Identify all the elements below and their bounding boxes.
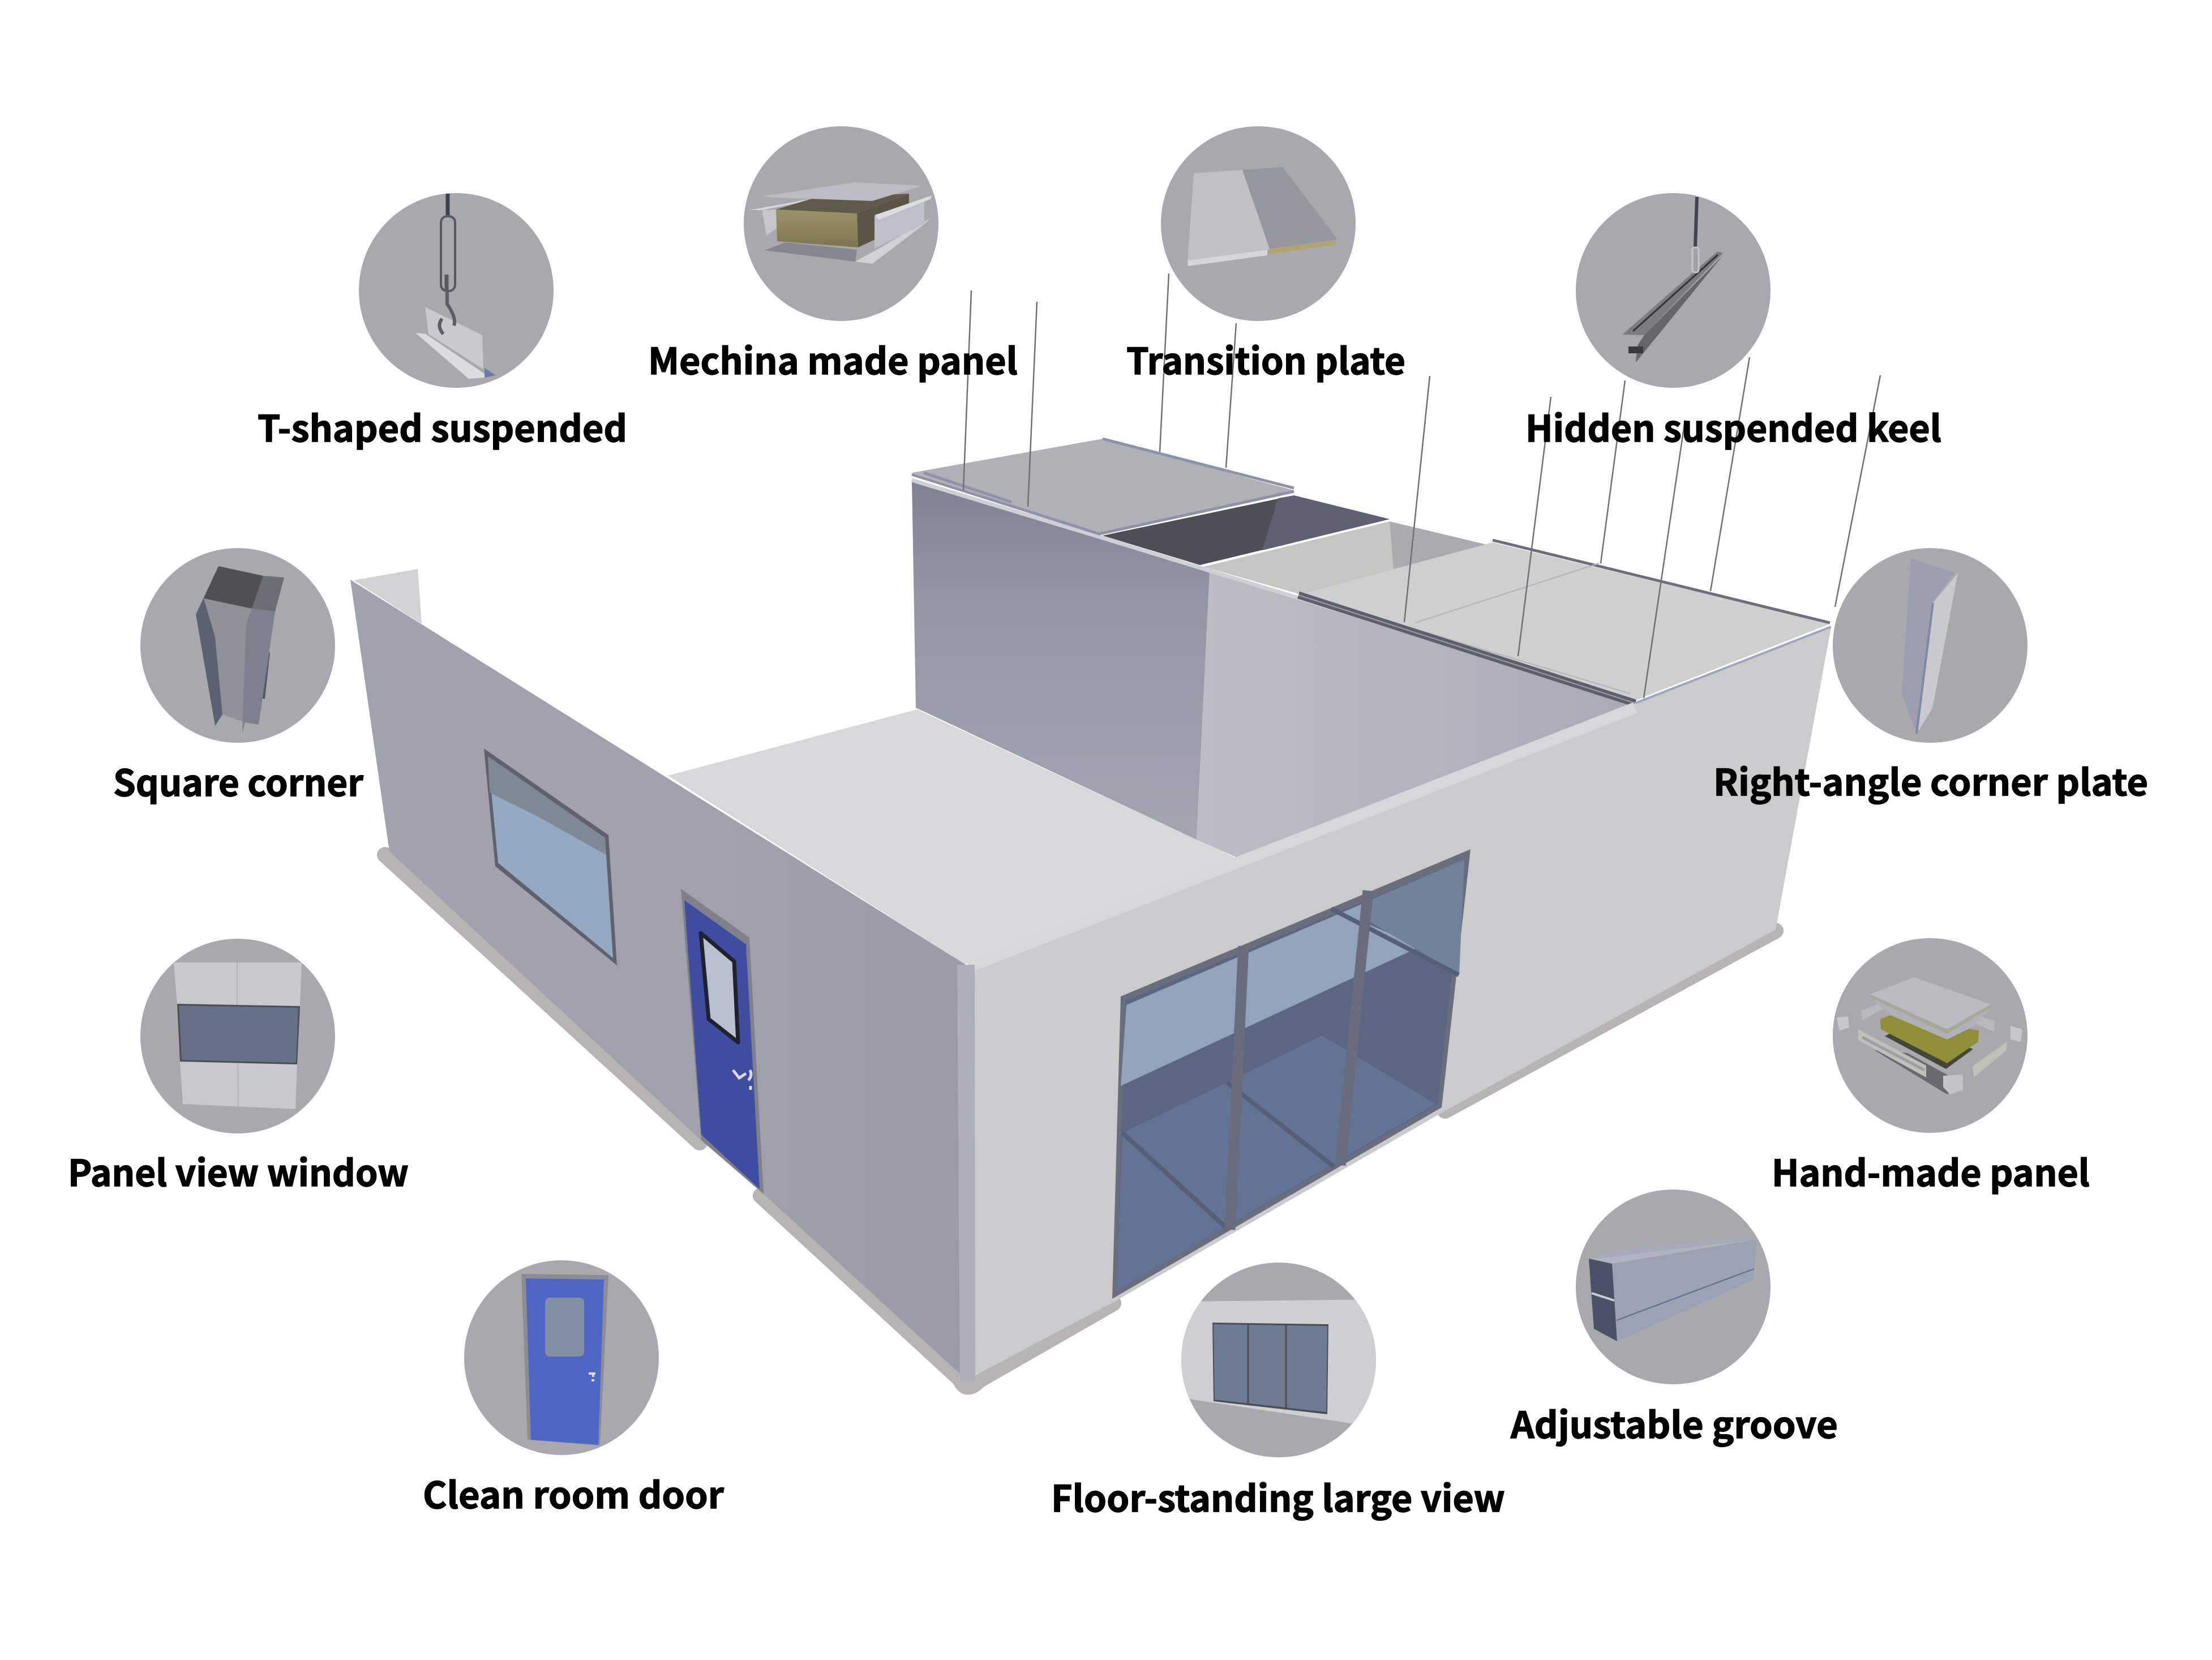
wire 8 [1644, 420, 1685, 698]
ceiling plate right back edge [1493, 540, 1830, 623]
wire 7 [1601, 380, 1625, 563]
clean room door leaf [684, 900, 760, 1189]
view window reflection [488, 756, 606, 855]
light opening inner side [1390, 521, 1489, 569]
rear block right wall [1197, 572, 1635, 859]
callout: Right-angle corner plate [1713, 548, 2148, 806]
front wall [975, 627, 1831, 1376]
glass upper [1121, 901, 1420, 1086]
label: Clean room door [423, 1467, 724, 1519]
room floor [668, 709, 1238, 964]
label: Hand-made panel [1772, 1145, 2090, 1197]
dark opening inner side [1262, 495, 1390, 550]
light ceiling opening [1203, 521, 1489, 594]
dark ceiling opening [1103, 495, 1390, 565]
callout: Panel view window [68, 939, 409, 1197]
callout: Hidden suspended keel [1525, 193, 1941, 452]
ceiling plate seam [1404, 563, 1630, 694]
icon: groove profile [1589, 1236, 1756, 1341]
ceiling plate left edges [912, 439, 1294, 534]
glass lower [1116, 859, 1464, 1291]
icon: blue door [521, 1274, 608, 1445]
clean room door frame [681, 889, 764, 1194]
icon: corner plate [1902, 558, 1958, 734]
rear block left wall [912, 480, 1210, 840]
wire 4 [1226, 323, 1236, 468]
glass inner lines [1122, 909, 1459, 1229]
door handle [733, 1070, 751, 1090]
large glass frame [1112, 849, 1471, 1299]
icon: panel with window [174, 962, 302, 1109]
circle [1181, 1263, 1376, 1457]
label: Transition plate [1126, 333, 1405, 385]
label: Mechina made panel [648, 333, 1018, 385]
circle [1576, 193, 1771, 388]
main clean room model [350, 439, 1831, 1387]
label: Right-angle corner plate [1713, 754, 2148, 806]
label: Adjustable groove [1510, 1397, 1838, 1449]
wire 9 [1711, 357, 1750, 591]
suspension wires [963, 273, 1880, 698]
circle [140, 939, 335, 1133]
callout: Clean room door [423, 1260, 724, 1519]
top rim of rear walls [912, 480, 1635, 702]
front wall top line [1635, 627, 1831, 703]
wire 3 [1160, 273, 1169, 452]
wire 5 [1404, 376, 1430, 622]
callout: Hand-made panel [1772, 938, 2090, 1197]
icon: square corner profile [196, 566, 284, 733]
callout: Floor-standing large view [1051, 1263, 1505, 1522]
icon: hand-made panel exploded view [1837, 977, 2022, 1094]
wire 10 [1835, 375, 1880, 607]
ceiling plate: left [912, 439, 1294, 533]
icon: wall with large window [1177, 1299, 1381, 1428]
icon: panel exploded view [750, 182, 932, 264]
circle [359, 193, 554, 388]
icon: hanger rod and T keel [415, 194, 496, 379]
callout: T-shaped suspended [258, 193, 627, 452]
corner post [957, 965, 975, 1381]
label: Panel view window [68, 1145, 409, 1197]
wire 6 [1518, 397, 1551, 656]
wire 1 [963, 290, 971, 490]
glass mullions [1230, 891, 1368, 1230]
label: T-shaped suspended [258, 400, 627, 452]
circle [744, 126, 938, 321]
left wall end top [354, 569, 422, 624]
door window [701, 933, 738, 1042]
hidden keel on ceiling plate [1298, 595, 1635, 703]
view window frame [484, 748, 617, 965]
callout: Adjustable groove [1510, 1190, 1838, 1449]
label: Square corner [113, 755, 363, 807]
glass floor reflection [1116, 1036, 1435, 1291]
circle [464, 1260, 659, 1455]
callout: Transition plate [1126, 126, 1405, 385]
view window glass [488, 756, 613, 958]
label: Floor-standing large view [1051, 1470, 1505, 1522]
glass upper right [1370, 859, 1464, 975]
ceiling plate: right [1301, 542, 1830, 700]
circle [1833, 938, 2027, 1133]
icon: transition plate [1188, 167, 1338, 266]
circle [140, 548, 335, 743]
icon: hidden keel [1622, 197, 1723, 362]
circle [1161, 126, 1356, 321]
callout: Square corner [113, 548, 363, 807]
callout: Mechina made panel [648, 126, 1018, 385]
circle [1833, 548, 2027, 743]
circle [1576, 1190, 1771, 1384]
label: Hidden suspended keel [1525, 400, 1941, 452]
wire 2 [1028, 302, 1037, 507]
baseboard [385, 855, 1776, 1387]
left wall [350, 580, 965, 1377]
front wall top strip [969, 708, 1635, 967]
